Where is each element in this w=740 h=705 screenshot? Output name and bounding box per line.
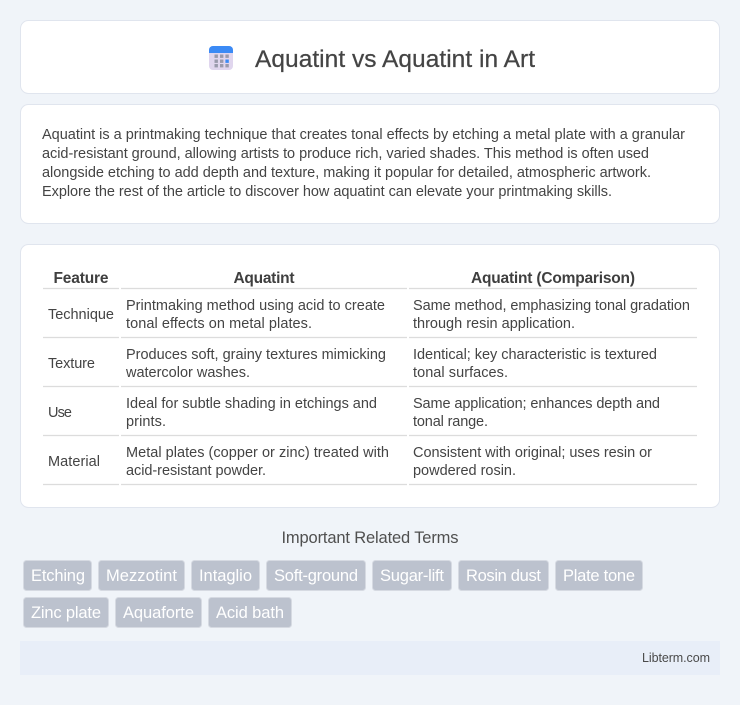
tag: Intaglio: Intaglio xyxy=(199,567,252,585)
tag: Rosin dust: Rosin dust xyxy=(466,567,541,585)
tag: Plate tone: Plate tone xyxy=(563,567,635,585)
tag: Zinc plate xyxy=(24,598,108,628)
tag: Soft-ground xyxy=(266,560,366,590)
text block: introduction paragraph: Explore the rest of the article to discover how aquatint can elevate your printmaking skills. xyxy=(42,184,612,200)
table row: technique: Same method, emphasizing tonal gradation xyxy=(413,298,690,314)
table row: technique: through resin application. xyxy=(413,316,575,332)
tag: Sugar-lift: Sugar-lift xyxy=(380,567,444,585)
table row: material: Consistent with original; uses resin or xyxy=(413,445,652,461)
title: Aquatint vs Aquatint in Art xyxy=(255,46,535,73)
footer xyxy=(20,641,720,675)
table row: technique xyxy=(43,298,697,338)
tag: Mezzotint xyxy=(98,560,184,590)
table row: texture: tonal surfaces. xyxy=(413,365,508,381)
table row: use: Use xyxy=(48,405,72,421)
table row: use xyxy=(43,396,697,436)
table row: texture: Identical; key characteristic is textured xyxy=(413,347,657,363)
table row: use: Same application; enhances depth and xyxy=(413,396,660,412)
table row: material: Metal plates (copper or zinc) treated with xyxy=(126,445,389,461)
tag cloud: related terms xyxy=(24,560,642,628)
tag: Acid bath: Acid bath xyxy=(216,604,284,622)
table row: material: powdered rosin. xyxy=(413,463,516,479)
table row: use: tonal range. xyxy=(413,414,488,430)
tag: Etching: Etching xyxy=(31,567,85,585)
tag: Zinc plate: Zinc plate xyxy=(31,604,101,622)
table row: material: Material xyxy=(48,454,100,470)
text block: introduction paragraph: Aquatint is a printmaking technique that creates tonal effects by etching a metal plate with a granular xyxy=(42,127,685,143)
text block: introduction paragraph: alongside etching to add depth and texture, making it popular for detailed, atmospheric artwork. xyxy=(42,165,651,181)
footer: Libterm.com xyxy=(642,651,710,665)
table row: technique: tonal effects on metal plates. xyxy=(126,316,312,332)
table row: texture: watercolor washes. xyxy=(125,365,250,381)
table header: Aquatint xyxy=(234,270,294,287)
table header: Feature xyxy=(54,270,109,287)
table row: material: acid-resistant powder. xyxy=(126,463,266,479)
table row: material xyxy=(43,445,697,484)
text block: introduction paragraph: acid-resistant ground, allowing artists to produce rich, varied shades. This method is often used xyxy=(42,146,649,162)
tag: Rosin dust xyxy=(458,560,548,590)
tag: Etching xyxy=(24,560,92,590)
panel: title header xyxy=(20,20,720,94)
table header xyxy=(43,270,697,288)
table row: technique: Printmaking method using acid to create xyxy=(126,298,385,314)
table header: Aquatint (Comparison) xyxy=(471,270,635,287)
tag: Soft-ground: Soft-ground xyxy=(274,567,358,585)
tag: Plate tone xyxy=(556,560,642,590)
panel: comparison table xyxy=(20,244,720,508)
icon: calendar xyxy=(209,46,233,70)
panel: introduction xyxy=(20,104,720,224)
tag: Aquaforte xyxy=(116,598,202,628)
table row: texture: Produces soft, grainy textures mimicking xyxy=(126,347,386,363)
heading: related terms: Important Related Terms xyxy=(282,529,458,547)
tag: Sugar-lift xyxy=(372,560,452,590)
table row: use: Ideal for subtle shading in etchings and xyxy=(126,396,377,412)
table row: use: prints. xyxy=(126,414,166,430)
tag: Mezzotint: Mezzotint xyxy=(106,567,177,585)
table row: texture: Texture xyxy=(48,356,95,372)
text block: introduction paragraph xyxy=(42,127,685,200)
tag: Intaglio xyxy=(192,560,260,590)
tag: Aquaforte: Aquaforte xyxy=(123,604,194,622)
tag: Acid bath xyxy=(208,598,292,628)
table row: technique: Technique xyxy=(48,307,114,323)
table row: texture xyxy=(43,347,697,386)
